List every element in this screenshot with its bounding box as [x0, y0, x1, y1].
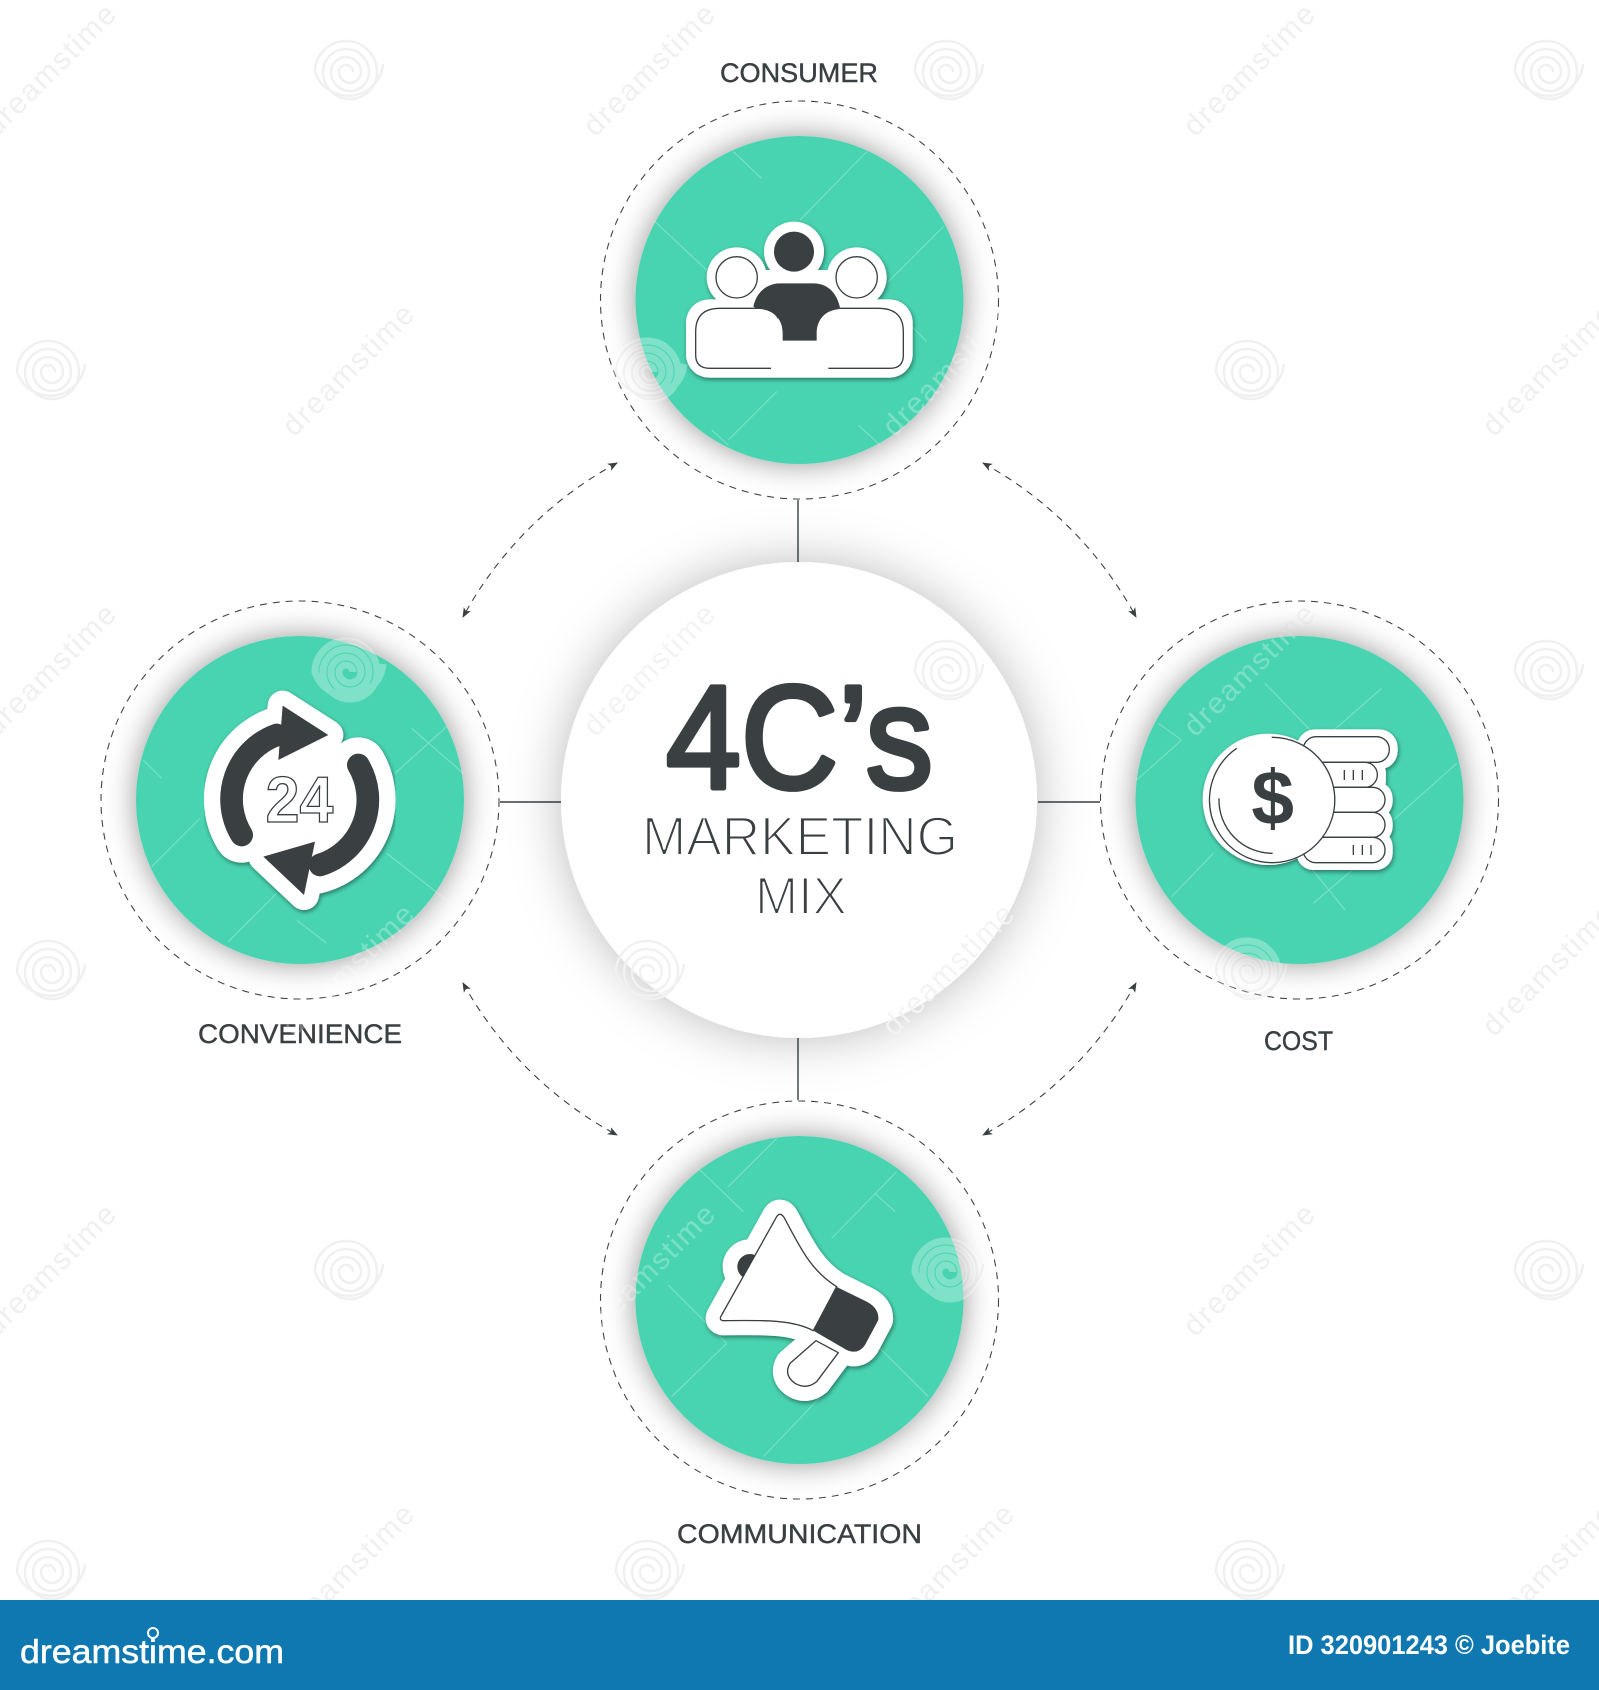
label: cost: COST: [1264, 1026, 1333, 1056]
subtitle: mix: MIX: [755, 867, 847, 926]
watermark: background diagonal text: dreamstime: [1177, 598, 1322, 743]
icon: dollar coins: $: [1251, 757, 1294, 842]
watermark: overlay diagonal text: [276, 298, 1322, 1343]
watermark: background diagonal text: dreamstime: [577, 0, 722, 143]
title: 4C's: 4C’s: [666, 656, 933, 820]
panel: cost: [1100, 601, 1498, 1056]
watermark on center circle: [577, 598, 1021, 1043]
watermark: overlay spirals: [315, 341, 1284, 1299]
panel: convenience: [101, 601, 499, 1049]
footer id text: ID 320901243 © Joebite: [1288, 1630, 1570, 1660]
watermark: background diagonal text: dreamstime: [1177, 0, 1322, 143]
icon: 24 hour cycle: 24: [266, 763, 333, 836]
icon: megaphone: [720, 1214, 878, 1386]
label: consumer: CONSUMER: [720, 58, 878, 88]
watermark: overlay diagonal text: dreamstime: [1177, 598, 1322, 743]
watermark grid lines: cost: [1137, 683, 1457, 910]
footer band: [0, 1600, 1599, 1690]
center circle: [561, 562, 1037, 1043]
arrow: cost to communication: [983, 983, 1136, 1135]
watermark grid lines: communication: [668, 1138, 928, 1457]
panel: communication: [600, 1101, 998, 1549]
watermark grid lines: convenience: [143, 727, 463, 943]
watermark: background diagonal text: dreamstime: [876, 1498, 1021, 1643]
label: convenience: CONVENIENCE: [198, 1019, 402, 1049]
footer logo text: dreamstime.com: [20, 1633, 284, 1670]
watermark: background diagonal text: dreamstime: [1177, 1198, 1322, 1343]
arrow: consumer to cost: [983, 463, 1136, 617]
watermark: overlay diagonal text: dreamstime: [276, 898, 421, 1043]
arrow: consumer to convenience: [463, 463, 617, 617]
panel: consumer: [600, 58, 998, 499]
icon: 24 hour cycle: [232, 706, 368, 895]
connector lines: [500, 500, 1100, 1100]
watermark grid lines: consumer: [655, 152, 943, 445]
arrow: convenience to communication: [463, 983, 617, 1135]
watermark: overlay diagonal text: dreamstime: [876, 298, 1021, 443]
subtitle: marketing: MARKETING: [642, 805, 958, 867]
watermark: overlay diagonal text: dreamstime: [577, 1198, 722, 1343]
icon: consumer group: [686, 222, 913, 378]
watermark on center circle: dreamstime: [577, 598, 722, 743]
watermark: background diagonal text: dreamstime: [276, 298, 421, 443]
watermark on center circle: dreamstime: [876, 898, 1021, 1043]
watermark: background diagonal text: dreamstime: [276, 1498, 421, 1643]
label: communication: COMMUNICATION: [677, 1519, 922, 1549]
icon: dollar coins: [1203, 729, 1398, 870]
footer logo spiral: [148, 1628, 158, 1638]
